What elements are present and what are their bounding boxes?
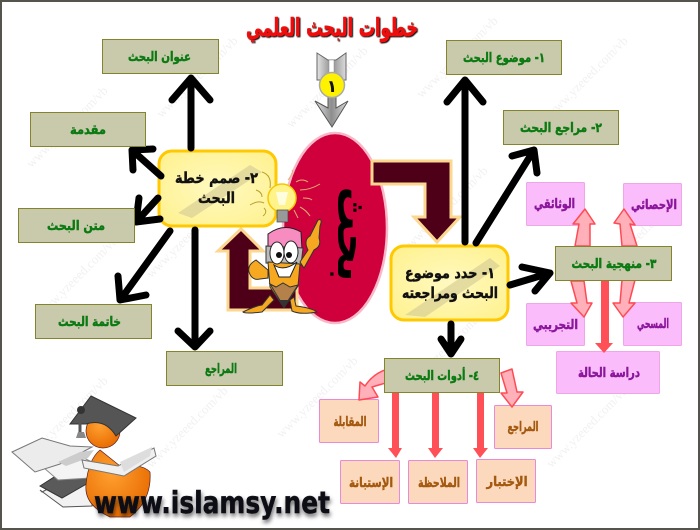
text: www.yzeeed.com/vb: [23, 373, 111, 461]
text: www.yzeeed.com/vb: [413, 13, 501, 101]
box: case study: دراسة الحالة: [578, 366, 640, 381]
step 1 box: ١- حدد موضوع: [405, 264, 495, 282]
box: experimental: التجريبي: [533, 318, 578, 333]
box: documentary: الوثائقي: [534, 197, 575, 212]
box: body: متن البحث: [47, 219, 105, 234]
box: experimental: [526, 304, 584, 346]
step 1 box: البحث ومراجعته: [402, 284, 498, 302]
box: conclusion: خاتمة البحث: [58, 315, 121, 330]
pencil mascot with light bulb: [243, 170, 321, 313]
box: sources: [494, 406, 552, 448]
box: bibliography: [166, 352, 282, 386]
box: interview: المقابلة: [334, 415, 366, 430]
step 2 box: البحث: [198, 189, 235, 207]
text: www.yzeeed.com/vb: [543, 383, 631, 471]
box: test: الإختبار: [486, 475, 528, 490]
text: www.yzeeed.com/vb: [283, 43, 371, 131]
arrow: maroon from ellipse to step 1: [372, 161, 460, 242]
box: methodology: ٣- منهجية البحث: [572, 257, 657, 272]
text: www.yzeeed.com/vb: [543, 33, 631, 121]
text: www.yzeeed.com/vb: [143, 193, 231, 281]
step 1 box: [391, 246, 508, 320]
box: observation: الملاحظة: [418, 476, 460, 491]
box: survey: المسحي: [637, 317, 669, 332]
title: خطوات البحث العلمي: [246, 13, 418, 43]
box: sources: المراجع: [508, 420, 538, 435]
text: www.yzeeed.com/vb: [403, 303, 491, 391]
box: body: [18, 208, 134, 242]
icon: graduate reading with books: [12, 396, 156, 517]
center ellipse with calligraphy: بحث: [327, 186, 378, 282]
text: www.yzeeed.com/vb: [273, 353, 361, 441]
box: introduction: [30, 112, 146, 146]
box: survey: [624, 302, 682, 346]
box: conclusion: [36, 304, 152, 338]
box: methodology: [556, 246, 672, 280]
box: questionnaire: الإستبانة: [349, 476, 393, 491]
box: title of research: [102, 40, 218, 74]
box: tools: [384, 358, 500, 392]
arrows: tools branches: [359, 369, 523, 458]
box: statistical: [624, 184, 682, 226]
step 2 box: ٢- صمم خطة: [175, 169, 258, 187]
text: www.yzeeed.com/vb: [153, 33, 241, 121]
arrows: black connectors: [118, 78, 550, 354]
arrow: maroon from center to step 2: [218, 229, 297, 310]
text: www.yzeeed.com/vb: [33, 233, 121, 321]
box: bibliography: المراجع: [205, 362, 237, 377]
arrows: methodology branches: [571, 209, 637, 353]
box: statistical: الإحصائي: [631, 198, 677, 213]
box: questionnaire: [340, 460, 400, 504]
box: references: ٢- مراجع البحث: [520, 121, 602, 136]
box: case study: [556, 352, 660, 394]
box: interview: [320, 400, 378, 442]
box: references: [504, 110, 618, 144]
website url: www.islamsy.net: [94, 486, 330, 521]
box: introduction: مقدمة: [70, 123, 106, 138]
box: observation: [408, 460, 468, 504]
box: topic: ١- موضوع البحث: [463, 51, 545, 66]
center ellipse with calligraphy: [283, 133, 387, 323]
text: www.yzeeed.com/vb: [403, 163, 491, 251]
box: tools: ٤- أدوات البحث: [405, 367, 479, 384]
box: title of research: عنوان البحث: [128, 50, 191, 65]
box: topic: [446, 40, 562, 74]
icon: numbered step arrow: ١: [327, 77, 337, 97]
text: www.yzeeed.com/vb: [23, 83, 111, 171]
box: test: [476, 460, 536, 502]
icon: numbered step arrow: [315, 53, 348, 127]
text: www.yzeeed.com/vb: [143, 383, 231, 471]
step 2 box: [159, 151, 276, 226]
box: documentary: [526, 182, 584, 226]
text: www.yzeeed.com/vb: [593, 193, 681, 281]
